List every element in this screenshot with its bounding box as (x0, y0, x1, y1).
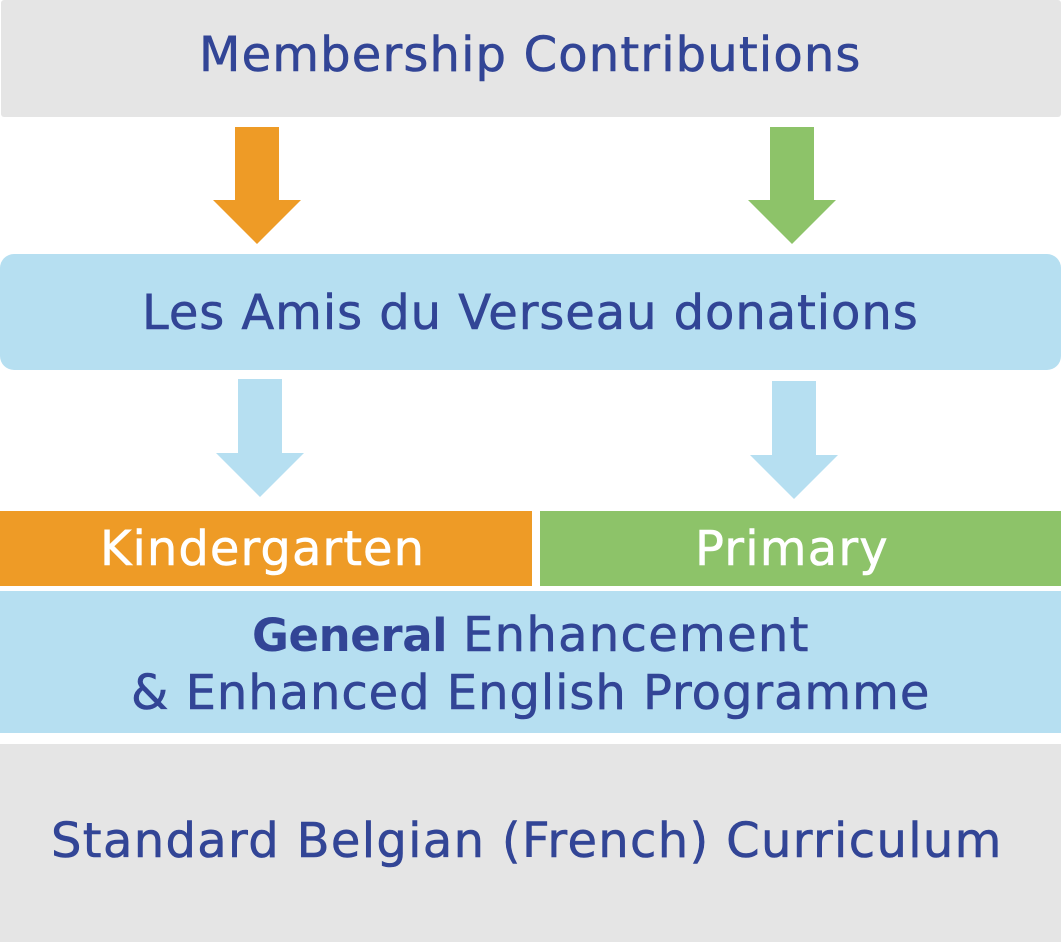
panel: general enhancement (0, 591, 1061, 733)
arrow: blue down left (216, 379, 304, 497)
arrow: blue down right (750, 381, 838, 499)
heading: standard curriculum: Standard Belgian (French) Curriculum (51, 813, 1003, 869)
panel: membership contributions (1, 0, 1061, 117)
label: primary: Primary (695, 521, 889, 577)
text: Enhancement: Enhancement (463, 607, 810, 663)
panel: standard curriculum (0, 744, 1061, 942)
arrow: orange down (213, 127, 301, 244)
label: kindergarten: Kindergarten (100, 521, 425, 577)
panel: Les Amis du Verseau donations (0, 254, 1061, 370)
text: Enhanced English Programme: & Enhanced English Programme (131, 665, 930, 721)
heading: Les Amis du Verseau donations: Les Amis du Verseau donations (142, 285, 919, 341)
heading: membership contributions: Membership Contributions (199, 27, 862, 83)
text: General: General (252, 609, 447, 662)
panel: primary (540, 511, 1061, 586)
panel: kindergarten (0, 511, 532, 586)
arrow: green down (748, 127, 836, 244)
